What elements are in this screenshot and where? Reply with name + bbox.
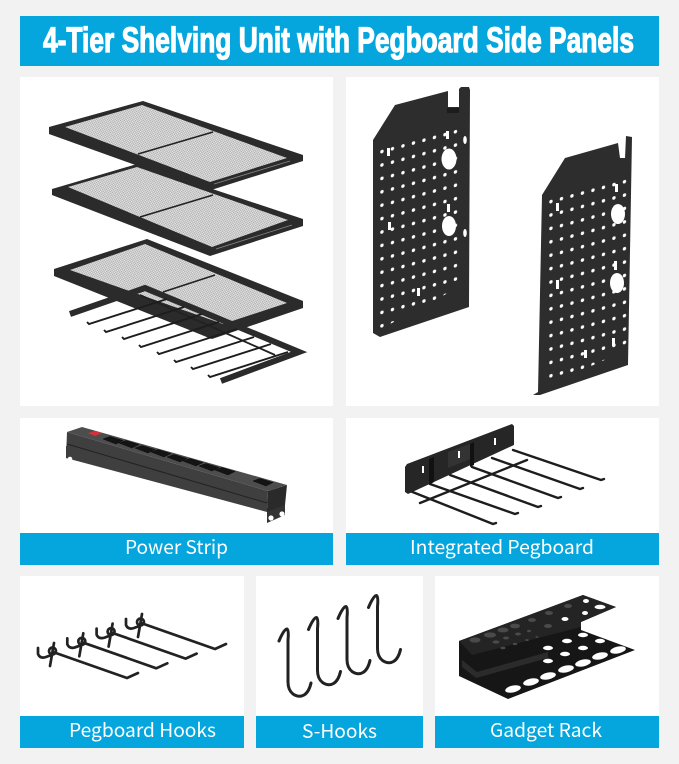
panel: pegboard side panels (346, 77, 659, 406)
panel: power strip (20, 418, 333, 565)
label bar: power strip (20, 533, 333, 565)
panel: integrated pegboard (346, 418, 659, 565)
icon: gadget rack (459, 595, 635, 699)
right pegboard panel (533, 136, 632, 395)
label bar: s-hooks: S-Hooks (302, 717, 377, 744)
panel: s-hooks (256, 576, 423, 748)
panel: exploded shelves (20, 77, 333, 406)
label bar: gadget rack (435, 716, 659, 748)
shelf 2 (middle mesh shelf) (52, 164, 303, 256)
label bar: pegboard hooks (20, 716, 244, 748)
label bar: pegboard hooks: Pegboard Hooks (69, 716, 216, 743)
icon: power strip (66, 427, 287, 523)
label bar: gadget rack: Gadget Rack (490, 716, 603, 743)
bottom tool rack with tines (70, 288, 299, 381)
panel: pegboard hooks (20, 576, 244, 748)
label bar: integrated pegboard: Integrated Pegboard (410, 533, 594, 560)
shelf 1 (top mesh shelf) (49, 101, 303, 191)
label bar: power strip: Power Strip (125, 533, 228, 560)
label bar: integrated pegboard (346, 533, 659, 565)
shelf 3 (lowest mesh shelf) (54, 239, 303, 339)
panel: gadget rack (435, 576, 659, 748)
label bar: s-hooks (256, 716, 423, 748)
icon: integrated pegboard rack (405, 424, 604, 524)
icon: four s-hooks (279, 596, 400, 696)
icon: four pegboard hooks (38, 614, 226, 678)
left pegboard panel (373, 87, 470, 337)
